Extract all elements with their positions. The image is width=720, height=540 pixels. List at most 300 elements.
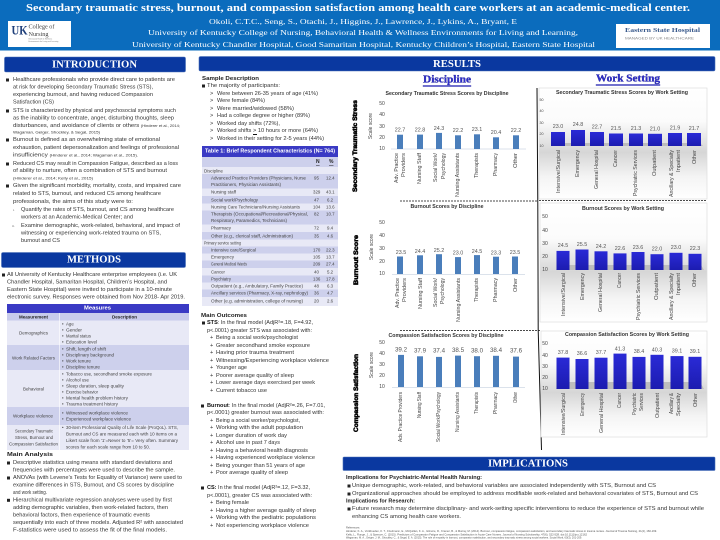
text block: main outcomes: + <box>210 463 213 469</box>
chart: secondary traumatic stress by work setting <box>539 88 707 199</box>
logo: Eastern State Hospital <box>616 24 710 48</box>
text block: main outcomes: Working with the adult population <box>216 425 303 431</box>
references: References: <box>346 526 360 530</box>
chart: burnout by discipline <box>369 204 525 322</box>
chart: secondary traumatic stress by work setting: 50 <box>540 98 544 102</box>
text block: introduction: ii. <box>12 224 15 228</box>
table: measures: Secondary Traumatic <box>15 428 54 434</box>
chart: burnout by discipline: Burnout Scores by Discipline <box>410 204 484 210</box>
chart: compassion satisfaction by work setting: 38.4 <box>634 349 644 355</box>
chart: compassion satisfaction by work setting: Intensive/Surgical <box>561 393 567 435</box>
chart: compassion satisfaction by discipline: 37.6 <box>510 348 523 354</box>
text block: introduction: as the inability to concentrate, anger, disturbing thoughts, sleep <box>13 115 174 121</box>
text block: introduction: Burnout is defined as an overwhelming state of emotional <box>13 137 160 143</box>
chart: secondary traumatic stress by discipline: 20.4 <box>491 130 501 136</box>
text block: main analysis: F-statistics were used to assess the fit of the final models. <box>13 528 167 534</box>
text block: sample description: > <box>210 91 213 97</box>
table: measures <box>7 304 189 450</box>
table: measures: Description <box>112 314 137 320</box>
text block: main outcomes: + <box>210 335 213 341</box>
text block: main outcomes: Being younger than 51 years of age <box>216 463 305 469</box>
chart: secondary traumatic stress by discipline <box>368 91 526 197</box>
chart: secondary traumatic stress by discipline: 24.3 <box>434 126 444 132</box>
chart: compassion satisfaction by work setting: Compassion Satisfaction Scores by Work Setting <box>565 332 689 338</box>
table: measures: • <box>62 340 64 344</box>
table: brief respondent characteristics: General Medical Wards <box>211 262 248 266</box>
heading: implications <box>343 457 715 470</box>
text block: main outcomes: + <box>210 515 213 521</box>
text block: implications: Organizational approaches should be employed to address modifiable work-related and behavioral covariates of STS, Burnout and CS <box>352 491 698 497</box>
table: measures: Sleep duration, sleep quality <box>66 384 125 388</box>
table: measures: • <box>62 364 64 370</box>
table: brief respondent characteristics: 48 <box>314 284 319 288</box>
chart: secondary traumatic stress by discipline: Therapists <box>474 153 480 178</box>
chart: burnout by discipline: 50 <box>379 220 385 226</box>
text block: main outcomes: Current tobacco use <box>216 388 267 394</box>
table: measures: Age <box>66 322 74 326</box>
chart: burnout by work setting: Ancillary & Specialty <box>669 273 675 320</box>
table: measures: • <box>62 425 64 430</box>
table: measures: Gender <box>66 328 83 332</box>
text block: introduction: Healthcare professionals who provide direct care to patients are <box>13 77 175 83</box>
text block: introduction: insufficiency (Hinderer et al., 2014; Wagaman et al., 2015). <box>13 152 138 158</box>
table: brief respondent characteristics: 72 <box>314 226 319 230</box>
chart: compassion satisfaction by discipline: 38.0 <box>471 348 484 354</box>
table: measures: Demographics <box>19 330 49 336</box>
logo: UK College of Nursing: UK <box>12 22 28 38</box>
references: Wagaman, M. A., Geiger, J. M., Shockley, C., & Segal, E. A. (2015). The role of empathy in burnout, compassion satisfaction, and secondary traumatic stress among social workers. Social Work, 60(3), 201-209. <box>346 536 582 540</box>
chart: secondary traumatic stress by work setting: Psychiatric Services <box>633 150 639 196</box>
chart: compassion satisfaction by work setting: 10 <box>542 386 548 392</box>
table: brief respondent characteristics <box>202 146 338 306</box>
chart: burnout by work setting: 22.3 <box>690 246 700 252</box>
table: brief respondent characteristics: 2.6 <box>327 298 334 304</box>
chart: secondary traumatic stress by discipline: Nursing Staff <box>417 152 423 184</box>
table: measures: • <box>62 334 64 338</box>
text block: methods: Eastern State Hospital) were invited to participate in a 10-minute <box>7 287 172 293</box>
chart: secondary traumatic stress by discipline: Providers <box>401 153 407 177</box>
text block: main outcomes: + <box>210 358 213 364</box>
chart: secondary traumatic stress by work setting: Ancillary & Specialty <box>669 150 675 197</box>
chart: compassion satisfaction by discipline: Pharmacy <box>493 392 499 414</box>
table: brief respondent characteristics: 9.4 <box>327 226 334 230</box>
text block: introduction: Given the significant morbidity, mortality, costs, and impaired care <box>13 183 181 189</box>
chart: compassion satisfaction by work setting: 41.3 <box>615 346 625 352</box>
table: brief respondent characteristics: Table 1: Brief Respondent Characteristics (N= 764) <box>205 148 335 154</box>
text block: main outcomes: Being a social work/psychologist <box>216 335 298 341</box>
table: measures: scores for each scale range from 10 to 50. <box>66 444 150 450</box>
chart: burnout by discipline: Scale score <box>369 234 375 260</box>
text block: main outcomes: Greater secondhand smoke exposure <box>216 343 310 349</box>
chart: compassion satisfaction by work setting: 40.3 <box>652 348 662 354</box>
chart: secondary traumatic stress by work setting: 20 <box>540 132 544 136</box>
table: measures: Work tenure <box>66 358 92 364</box>
chart: burnout by work setting: 50 <box>542 214 548 220</box>
chart: burnout by discipline: Nursing Staff <box>418 277 424 309</box>
table: measures: 30-item Professional Quality of Life Scale (ProQoL). STS, <box>66 425 178 430</box>
table: measures: Exercise behavior <box>66 390 98 394</box>
text block: implications: Implications for Research: <box>346 498 415 504</box>
text block: introduction: professionals, the aims of this study were to: <box>13 199 133 205</box>
heading: introduction <box>4 57 186 72</box>
chart: compassion satisfaction by work setting: Services <box>639 393 645 411</box>
chart: compassion satisfaction by discipline: 38.4 <box>490 347 503 354</box>
chart: burnout by work setting: 23.6 <box>633 245 643 251</box>
text block: sample description: > <box>210 136 213 142</box>
table: brief respondent characteristics: Social work/Psychology <box>211 198 259 202</box>
references: Kelly, L., Runge, J., & Spencer, C. (2015). Predictors of Compassion Fatigue and Compassion Satisfaction in Acute Care Nurses. Journal of Nursing Scholarship, 47(6), 522-528. doi:10.1111/jnu.12162 <box>346 532 588 536</box>
text block: sample description <box>202 76 324 142</box>
chart: compassion satisfaction by work setting: General Hospital <box>599 393 605 433</box>
text block: main outcomes: STS: In the final model (AdjR²=.18, F=4.92, <box>207 320 313 326</box>
divider: vertical and dashed lines <box>400 88 707 450</box>
chart: secondary traumatic stress by discipline: 22.2 <box>453 128 463 134</box>
table: brief respondent characteristics: 10.7 <box>326 212 335 216</box>
chart: compassion satisfaction by work setting: Cancer <box>617 393 623 408</box>
table: brief respondent characteristics: 5.2 <box>327 270 334 274</box>
text block: main outcomes: + <box>210 433 213 439</box>
heading: introduction: INTRODUCTION <box>52 58 137 70</box>
subheading: work setting: Work Setting <box>596 74 660 84</box>
chart: compassion satisfaction by discipline: 30 <box>379 362 385 368</box>
chart: burnout by discipline: 10 <box>379 271 385 277</box>
text block: introduction: witnessing or experiencing work-related trauma on STS, <box>20 230 161 236</box>
text block: main outcomes: + <box>210 440 213 446</box>
chart: compassion satisfaction by work setting: Psychiatric <box>632 393 638 415</box>
text block: introduction: Satisfaction (CS) <box>13 99 54 105</box>
logo: Eastern State Hospital: Eastern State Hospital <box>625 27 700 34</box>
table: brief respondent characteristics: 47 <box>314 198 319 202</box>
chart: burnout by work setting: 40 <box>542 228 548 234</box>
table: measures: Discipline tenure <box>66 364 101 370</box>
text block: introduction: experiencing burnout, and having reduced Compassion <box>13 92 153 98</box>
chart: compassion satisfaction by work setting: 50 <box>542 341 548 347</box>
heading: results: RESULTS <box>433 58 481 70</box>
chart: burnout by discipline: Psychology <box>440 278 446 304</box>
chart: compassion satisfaction by discipline: Social Work/Psychology <box>436 392 442 442</box>
chart: burnout by work setting: Other <box>692 273 698 287</box>
table: brief respondent characteristics: 35 <box>314 234 319 238</box>
chart: burnout by discipline: Nursing Assistants <box>456 278 462 322</box>
text block: main outcomes: + <box>210 508 213 514</box>
table: measures: Likert scale from ‘1’=Never to ‘5’= Very often. Summary <box>66 438 179 443</box>
chart: burnout by discipline: Other <box>513 278 519 292</box>
vertical label: compassion satisfaction: Compassion Satisfaction <box>354 354 360 432</box>
text block: introduction: burnout and CS <box>21 238 60 244</box>
text block: introduction: disturbances, and avoidance of clients or others (Hinderer et al., 2014; <box>13 123 180 129</box>
chart: burnout by work setting: Outpatient <box>654 272 660 300</box>
table: measures: Shift, length of shift <box>66 346 107 352</box>
chart: secondary traumatic stress by work setting: 24.8 <box>573 122 583 128</box>
chart: compassion satisfaction by work setting: Emergency <box>580 393 586 416</box>
chart: compassion satisfaction by discipline: Nursing Assistants <box>455 392 461 432</box>
chart: burnout by discipline: 40 <box>379 233 385 239</box>
chart: secondary traumatic stress by work setting: 23.0 <box>553 124 563 130</box>
table: measures: Disciplinary background <box>66 352 115 358</box>
text block: main outcomes: Having prior trauma treatment <box>216 350 294 356</box>
table: brief respondent characteristics: Emergency <box>211 254 235 260</box>
chart: burnout by discipline: 24.5 <box>472 249 482 255</box>
table: brief respondent characteristics: 82 <box>314 212 319 216</box>
chart: secondary traumatic stress by discipline: 20 <box>379 135 385 141</box>
text block: main analysis: Hierarchical multivariate regression analyses were used by first <box>13 497 172 503</box>
text block: introduction: of ability to nurture, often a combination of STS and burnout <box>13 168 167 174</box>
text block: sample description: The majority of participants: <box>207 83 280 89</box>
chart: burnout by work setting: Psychiatric Services <box>636 273 642 320</box>
text block: main outcomes: + <box>210 380 213 386</box>
chart: compassion satisfaction by discipline: 50 <box>379 340 385 346</box>
table: brief respondent characteristics: 17.8 <box>326 276 335 282</box>
text block: main analysis: and work setting. <box>13 490 47 496</box>
text block: introduction: STS is characterized by physical and psychosocial symptoms such <box>13 108 176 114</box>
text block: main analysis <box>7 452 183 534</box>
table: measures: Stress, Burnout and <box>15 435 54 440</box>
table: brief respondent characteristics: Therapists (Occupational/Recreational/Physical, <box>211 212 308 216</box>
table: brief respondent characteristics: Other (e.g., clerical staff, Administration) <box>211 234 294 238</box>
text block: main analysis: sequentially into each of three models. Adjusted R² with associated <box>13 520 183 526</box>
text block: main analysis: examine differences in STS, Burnout, and CS scores by discipline <box>13 483 174 489</box>
chart: compassion satisfaction by work setting: 30 <box>542 364 548 370</box>
chart: secondary traumatic stress by discipline: Pharmacy <box>493 153 499 176</box>
text block: introduction: i. <box>13 208 15 212</box>
chart: secondary traumatic stress by work setting: Inpatient <box>676 149 682 172</box>
chart: compassion satisfaction by discipline: 20 <box>379 373 385 379</box>
chart: secondary traumatic stress by work setting: Cancer <box>613 150 619 167</box>
chart: secondary traumatic stress by discipline: Other <box>513 153 519 168</box>
affiliation line two: University of Kentucky Chandler Hospital, Good Samaritan Hospital, Kentucky Children’s Hospital, Eastern State Hospital <box>132 41 595 49</box>
text block: main outcomes: Poor average quality of sleep <box>216 470 288 476</box>
table: brief respondent characteristics: Discipline <box>204 168 224 174</box>
text block: introduction: Examine demographic, work-related, behavioral, and impact of <box>21 223 180 229</box>
table: measures: • <box>62 410 64 416</box>
text block: sample description: Were female (84%) <box>217 98 265 104</box>
text block: main outcomes: + <box>210 425 213 431</box>
references: Hinderer, K. A., VonRueden, K. T., Friedmann, E., McQuillan, K. A., Gilmore, R., Kramer, B., & Murray, M. (2014). Burnout, compassion fatigue, compassion satisfaction, and secondary traumatic stress in trauma nurses. Journal of Trauma Nursing, 21(4), 160-169. <box>346 529 657 533</box>
chart: secondary traumatic stress by work setting: General Hospital <box>594 150 600 189</box>
chart: secondary traumatic stress by discipline: 50 <box>379 101 385 107</box>
chart: burnout by work setting: Inpatient <box>676 272 682 295</box>
table: measures: Work Related Factors <box>12 356 56 360</box>
text block: main analysis: behavioral factors, then experience of traumatic events <box>13 512 150 518</box>
text block: methods: All University of Kentucky Healthcare enterprise employees (i.e. UK <box>7 272 177 278</box>
text block: main analysis: frequencies with percentages were used to describe the sample. <box>13 467 175 473</box>
table: brief respondent characteristics: Advanced Practice Providers (Physicians, Nurse <box>211 176 307 180</box>
table: brief respondent characteristics: Intensive care/Surgical <box>211 248 256 252</box>
text block: methods: electronic survey. Responses were obtained from Nov 2018- Apr 2019. <box>7 294 185 300</box>
chart: secondary traumatic stress by discipline: 22.7 <box>395 128 405 134</box>
chart: burnout by discipline: Social Work/ <box>433 277 439 307</box>
chart: burnout by work setting <box>540 203 707 322</box>
chart: burnout by work setting: Emergency <box>580 273 586 300</box>
chart: burnout by work setting: 20 <box>542 254 548 260</box>
table: measures: Experienced workplace violence <box>66 416 132 422</box>
table: measures: Behavioral <box>23 386 44 392</box>
table: measures: • <box>62 378 64 382</box>
table: brief respondent characteristics: 40 <box>314 270 319 274</box>
heading: results <box>199 56 715 71</box>
text block: main outcomes: p<.0001) greater STS was associated with: <box>207 328 312 334</box>
table: brief respondent characteristics: 329 <box>313 190 321 194</box>
table: measures: • <box>62 390 64 394</box>
text block: implications: enhancing CS among health care workers. <box>352 514 461 520</box>
chart: secondary traumatic stress by work setting: 21.9 <box>670 126 680 132</box>
text block: main outcomes: Lower average days exercised per week <box>216 380 315 386</box>
chart: compassion satisfaction by discipline: Adv. Practice Providers <box>398 392 404 442</box>
chart: secondary traumatic stress by work setting: Emergency <box>575 150 581 177</box>
chart: compassion satisfaction by discipline: Other <box>513 392 519 403</box>
text block: introduction: related to STS, burnout, and reduced CS among healthcare <box>13 191 161 197</box>
chart: secondary traumatic stress by discipline: 10 <box>379 146 385 152</box>
table: brief respondent characteristics: 36 <box>314 290 319 296</box>
table: brief respondent characteristics: 105 <box>313 254 321 260</box>
table: brief respondent characteristics: 27.4 <box>326 262 335 266</box>
text block: main analysis: Descriptive statistics using means with standard deviations and <box>13 460 172 466</box>
chart: secondary traumatic stress by discipline: 23.1 <box>472 127 482 133</box>
table: brief respondent characteristics: 95 <box>314 176 319 180</box>
table: measures: • <box>62 352 64 358</box>
chart: secondary traumatic stress by discipline: Nursing Assistants <box>455 153 461 197</box>
chart: burnout by work setting: 30 <box>542 241 548 247</box>
table: brief respondent characteristics: 6.2 <box>327 198 334 202</box>
chart: compassion satisfaction by discipline: 37.4 <box>433 348 446 354</box>
text block: sample description: > <box>210 113 213 119</box>
chart: secondary traumatic stress by discipline: Secondary Traumatic Stress Scores by Discipline <box>386 91 509 97</box>
table: brief respondent characteristics: 6.3 <box>327 284 334 288</box>
table: brief respondent characteristics: 20 <box>314 298 319 304</box>
table: brief respondent characteristics: Pharmacy <box>211 226 232 230</box>
chart: compassion satisfaction by discipline: Compassion Satisfaction Scores by Discipline <box>388 333 504 339</box>
chart: burnout by discipline: 23.5 <box>510 250 520 256</box>
logo: UK College of Nursing: College of <box>28 24 55 30</box>
chart: compassion satisfaction by discipline: 10 <box>379 384 385 390</box>
text block: main outcomes: + <box>210 448 213 454</box>
text block: main outcomes: + <box>210 418 213 424</box>
text block: introduction: workers at an Academic-Medical Center; and <box>20 214 133 220</box>
table: brief respondent characteristics: 12.4 <box>326 176 335 180</box>
table: brief respondent characteristics: Other (e.g. administration, college of nursing) <box>211 298 304 304</box>
table: measures: • <box>62 322 64 326</box>
chart: burnout by work setting: 22.0 <box>652 246 662 252</box>
chart: compassion satisfaction by work setting: 39.1 <box>672 348 682 354</box>
chart: secondary traumatic stress by discipline: 30 <box>379 124 385 130</box>
chart: burnout by work setting: 10 <box>542 267 548 273</box>
table: brief respondent characteristics: Primary service setting <box>204 240 241 246</box>
text block: sample description: Worked day shifts (72%), <box>217 121 280 127</box>
chart: burnout by discipline: 25.2 <box>434 248 444 254</box>
table: brief respondent characteristics: 22.3 <box>326 248 335 252</box>
table: brief respondent characteristics: Psychiatry <box>211 276 232 282</box>
text block: introduction: (Hinderer et al., 2014; Kelly et al., 2015) <box>13 176 94 180</box>
chart: compassion satisfaction by discipline: Scale score <box>369 352 375 378</box>
text block: sample description: > <box>210 128 213 134</box>
chart: secondary traumatic stress by work setting: Intensive/Surgical <box>556 150 562 193</box>
table: measures: Mental health problem history <box>66 396 129 400</box>
table: brief respondent characteristics: 136 <box>313 276 321 282</box>
text block: main outcomes: CS: In the final model (AdjR²=.12, F=3.32, <box>207 485 310 491</box>
text block: main outcomes: + <box>210 523 213 529</box>
chart: compassion satisfaction by work setting: 37.8 <box>558 350 568 356</box>
chart: compassion satisfaction by discipline: 37.9 <box>414 348 427 354</box>
table: measures: • <box>62 328 64 332</box>
chart: burnout by work setting: Intensive/Surgical <box>561 273 567 316</box>
text block: main outcomes: Working with the pediatric populations <box>216 515 316 521</box>
text block: sample description: > <box>210 98 213 104</box>
text block: main analysis: adding demographic variables, then work-related factors, then <box>13 505 168 511</box>
text block: main outcomes: Alcohol use in past 7 days <box>216 440 280 446</box>
heading: implications: IMPLICATIONS <box>488 458 568 470</box>
text block: introduction: Quantify the rates of STS, burnout, and CS among healthcare <box>21 207 174 213</box>
table: measures: Tobacco use, secondhand smoke exposure <box>66 372 153 376</box>
chart: secondary traumatic stress by work setting: 10 <box>540 144 544 148</box>
chart: compassion satisfaction by discipline: 39.2 <box>395 346 408 354</box>
logo: UK College of Nursing: Behavioral Health & Wellness <box>28 38 52 40</box>
chart: burnout by discipline: 23.0 <box>453 250 463 256</box>
table: measures: Trauma treatment history <box>66 402 119 406</box>
text block: main outcomes: + <box>210 455 213 461</box>
chart: compassion satisfaction by work setting: Other <box>693 393 699 407</box>
table: brief respondent characteristics: 104 <box>313 204 321 210</box>
chart: secondary traumatic stress by discipline: Scale score <box>368 113 374 139</box>
chart: secondary traumatic stress by work setting: 40 <box>540 109 544 113</box>
table: measures: Compassion Satisfaction <box>9 442 59 446</box>
chart: secondary traumatic stress by work setting: Secondary Traumatic Stress Scores by Work Setting <box>556 90 688 96</box>
chart: burnout by discipline: Adv. Practice <box>395 278 401 308</box>
chart: compassion satisfaction by work setting: 37.7 <box>596 350 606 356</box>
chart: compassion satisfaction by discipline: 40 <box>379 351 385 357</box>
table: measures: • <box>62 402 64 406</box>
text block: main analysis: Main Analysis <box>7 452 53 458</box>
chart: compassion satisfaction by work setting: 39.1 <box>690 349 700 355</box>
text block: sample description: Worked in their setting for 2-5 years (44%) <box>217 136 324 142</box>
text block: introduction: Wagaman, Geiger, Shockley, & Segal, 2015) <box>13 130 101 134</box>
text block: main outcomes <box>201 313 329 529</box>
text block: sample description: Sample Description <box>202 76 259 82</box>
table: brief respondent characteristics: 13.7 <box>326 254 335 260</box>
text block: introduction: Reduced CS may result in Compassion Fatigue, described as a loss <box>13 161 178 167</box>
table: brief respondent characteristics: Nursing staff <box>211 190 237 194</box>
chart: burnout by work setting: 24.5 <box>558 243 568 249</box>
text block: sample description: > <box>210 121 213 127</box>
chart: burnout by discipline: 23.5 <box>396 250 406 256</box>
text block: methods: Chandler Hospital, Samaritan Hospital, Children’s Hospital, and <box>7 279 167 285</box>
chart: secondary traumatic stress by work setting: 21.7 <box>689 126 699 132</box>
chart: compassion satisfaction by work setting: Specialty <box>676 393 682 416</box>
table: measures: Measures <box>84 306 111 312</box>
text block: main outcomes: + <box>210 373 213 379</box>
logo: Eastern State Hospital: MANAGED BY UK HEALTHCARE <box>625 36 694 40</box>
chart: compassion satisfaction by work setting: 36.6 <box>577 351 587 357</box>
text block: main outcomes: p<.0001), greater CS was associated with: <box>207 493 312 499</box>
chart: burnout by discipline: Providers <box>402 278 408 302</box>
text block: sample description: Were between 26-35 years of age (41%) <box>217 91 318 97</box>
table: measures: • <box>62 384 64 388</box>
chart: secondary traumatic stress by work setting: 30 <box>540 121 544 125</box>
subheading: discipline: Discipline <box>423 74 472 86</box>
text block: sample description: Had a college degree or higher (89%) <box>217 113 310 119</box>
chart: burnout by work setting: 24.2 <box>596 244 606 250</box>
text block: sample description: Were married/widowed (58%) <box>217 106 294 112</box>
text block: implications: Unique demographic, work-related, and behavioral variables are associated independently with STS, Burnout and CS <box>352 483 656 489</box>
chart: compassion satisfaction by discipline: Therapists <box>474 392 480 414</box>
chart: compassion satisfaction by work setting: Outpatient <box>655 392 661 418</box>
table: measures: Measurement <box>19 314 49 320</box>
text block: main outcomes: Witnessing/Experiencing workplace violence <box>216 358 329 364</box>
table: brief respondent characteristics: Respiratory, Paramedics, Technicians) <box>211 218 288 223</box>
table: brief respondent characteristics: Nursing Care Technicians/Nursing Assistants <box>211 204 301 210</box>
heading: methods <box>2 252 186 268</box>
chart: secondary traumatic stress by discipline: 22.2 <box>511 128 521 134</box>
title: Secondary traumatic stress, burnout, and compassion satisfaction among health care workers at an academic-medical center. <box>26 3 690 14</box>
